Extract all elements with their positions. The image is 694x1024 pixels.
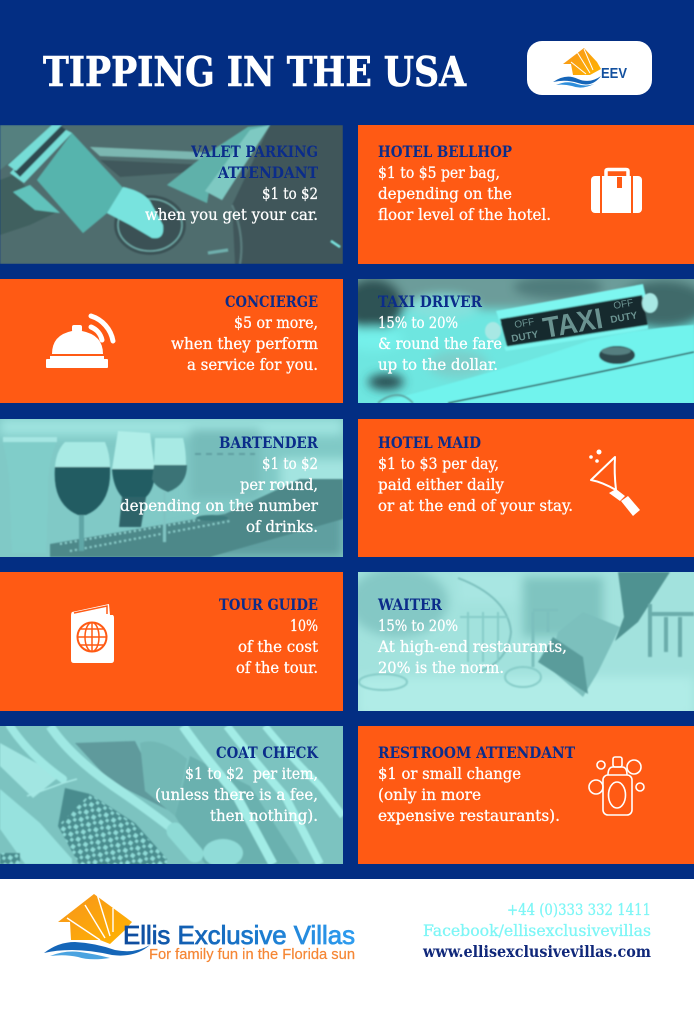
header logo badge — [527, 41, 652, 95]
tip details: of the cost — [238, 637, 318, 656]
tip details — [378, 313, 502, 374]
icon: cleaning brush — [589, 450, 640, 516]
tip details: of the tour. — [236, 658, 318, 677]
tip details — [378, 454, 573, 515]
tip details: $1 to $2 per item, — [185, 764, 318, 783]
tip details: up to the dollar. — [378, 355, 498, 374]
heading: RESTROOM ATTENDANT — [378, 743, 576, 762]
tip details: or at the end of your stay. — [378, 496, 573, 515]
heading: BARTENDER — [219, 433, 318, 452]
icon: service bell — [46, 316, 113, 368]
photo: taxi: OFF — [613, 298, 634, 312]
panel background — [0, 572, 343, 711]
tip details: (only in more — [378, 785, 481, 804]
tip details — [378, 163, 551, 224]
tip details — [378, 764, 560, 825]
tip details: depending on the — [378, 184, 512, 203]
logo name: Ellis Exclusive Villas — [123, 920, 355, 950]
tip details — [120, 454, 318, 536]
tip details: $1 or small change — [378, 764, 521, 783]
tip details: $5 or more, — [234, 313, 318, 332]
tip amount: $1 to $2 — [262, 184, 318, 203]
heading: HOTEL BELLHOP — [378, 142, 512, 161]
panel: concierge — [0, 279, 343, 403]
panel: taxi driver — [358, 279, 694, 403]
photo: valet — [0, 125, 343, 264]
tip details — [377, 616, 567, 677]
tip details — [236, 616, 318, 677]
title: TIPPING IN THE USA — [43, 48, 467, 96]
tip details: 15% to 20% — [378, 616, 458, 635]
icon: soap bottle — [589, 757, 644, 815]
tip details — [171, 313, 318, 374]
footer logo — [44, 894, 355, 963]
tip details: 10% — [290, 616, 318, 635]
contact details: www.ellisexclusivevillas.com — [422, 942, 651, 961]
tip details: $1 to $3 per day, — [378, 454, 499, 473]
heading: COAT CHECK — [216, 743, 319, 762]
panel: hotel maid — [358, 419, 694, 557]
panel: coat check — [0, 726, 343, 867]
heading line 2: ATTENDANT — [217, 163, 319, 182]
photo: taxi: TAXI — [541, 303, 605, 345]
icon: passport — [71, 604, 114, 663]
panel background — [358, 726, 694, 864]
tip details: when they perform — [171, 334, 318, 353]
heading: TOUR GUIDE — [219, 595, 318, 614]
tip details: floor level of the hotel. — [378, 205, 551, 224]
header logo badge: EEV — [601, 65, 627, 82]
photo: beer glasses — [0, 419, 350, 557]
photo: taxi: DUTY — [610, 310, 639, 326]
icon: suitcase — [591, 170, 642, 213]
tip details: per round, — [240, 475, 318, 494]
tip details: of drinks. — [246, 517, 318, 536]
heading: WAITER — [377, 595, 442, 614]
tip details: $1 to $2 — [262, 454, 318, 473]
logo waves — [44, 942, 150, 959]
tip note: when you get your car. — [145, 205, 318, 224]
contact details: +44 (0)333 332 1411 — [507, 900, 651, 919]
tip details: depending on the number — [120, 496, 318, 515]
panel background — [358, 419, 694, 557]
photo: taxi — [358, 279, 694, 403]
panel: tour guide — [0, 572, 343, 711]
panel: valet parking — [0, 125, 343, 264]
contact details — [422, 900, 651, 961]
photo: taxi: OFF — [514, 317, 535, 331]
tip details: At high-end restaurants, — [377, 637, 567, 656]
panel: restroom attendant — [358, 726, 694, 864]
panel background — [358, 125, 694, 264]
logo tagline: For family fun in the Florida sun — [149, 946, 355, 963]
tip details: 20% is the norm. — [378, 658, 504, 677]
photo: table setting — [358, 572, 694, 711]
tip details: then nothing). — [210, 806, 318, 825]
heading: VALET PARKING — [190, 142, 318, 161]
tip details: a service for you. — [187, 355, 318, 374]
tip details: & round the fare — [378, 334, 502, 353]
tip details: expensive restaurants). — [378, 806, 560, 825]
panel: waiter — [358, 572, 694, 711]
panel: bartender — [0, 419, 350, 557]
tip details: $1 to $5 per bag, — [378, 163, 500, 182]
photo: taxi: DUTY — [511, 329, 540, 345]
panel background — [0, 279, 343, 403]
contact details: Facebook/ellisexclusivevillas — [423, 921, 651, 940]
heading: TAXI DRIVER — [378, 292, 482, 311]
tip details: 15% to 20% — [378, 313, 458, 332]
logo house — [58, 894, 132, 944]
tip details — [155, 764, 318, 825]
heading: CONCIERGE — [225, 292, 318, 311]
tip details: paid either daily — [378, 475, 505, 494]
photo: hangers — [0, 726, 343, 867]
heading: HOTEL MAID — [378, 433, 481, 452]
tip details: (unless there is a fee, — [155, 785, 318, 804]
panel: hotel bellhop — [358, 125, 694, 264]
